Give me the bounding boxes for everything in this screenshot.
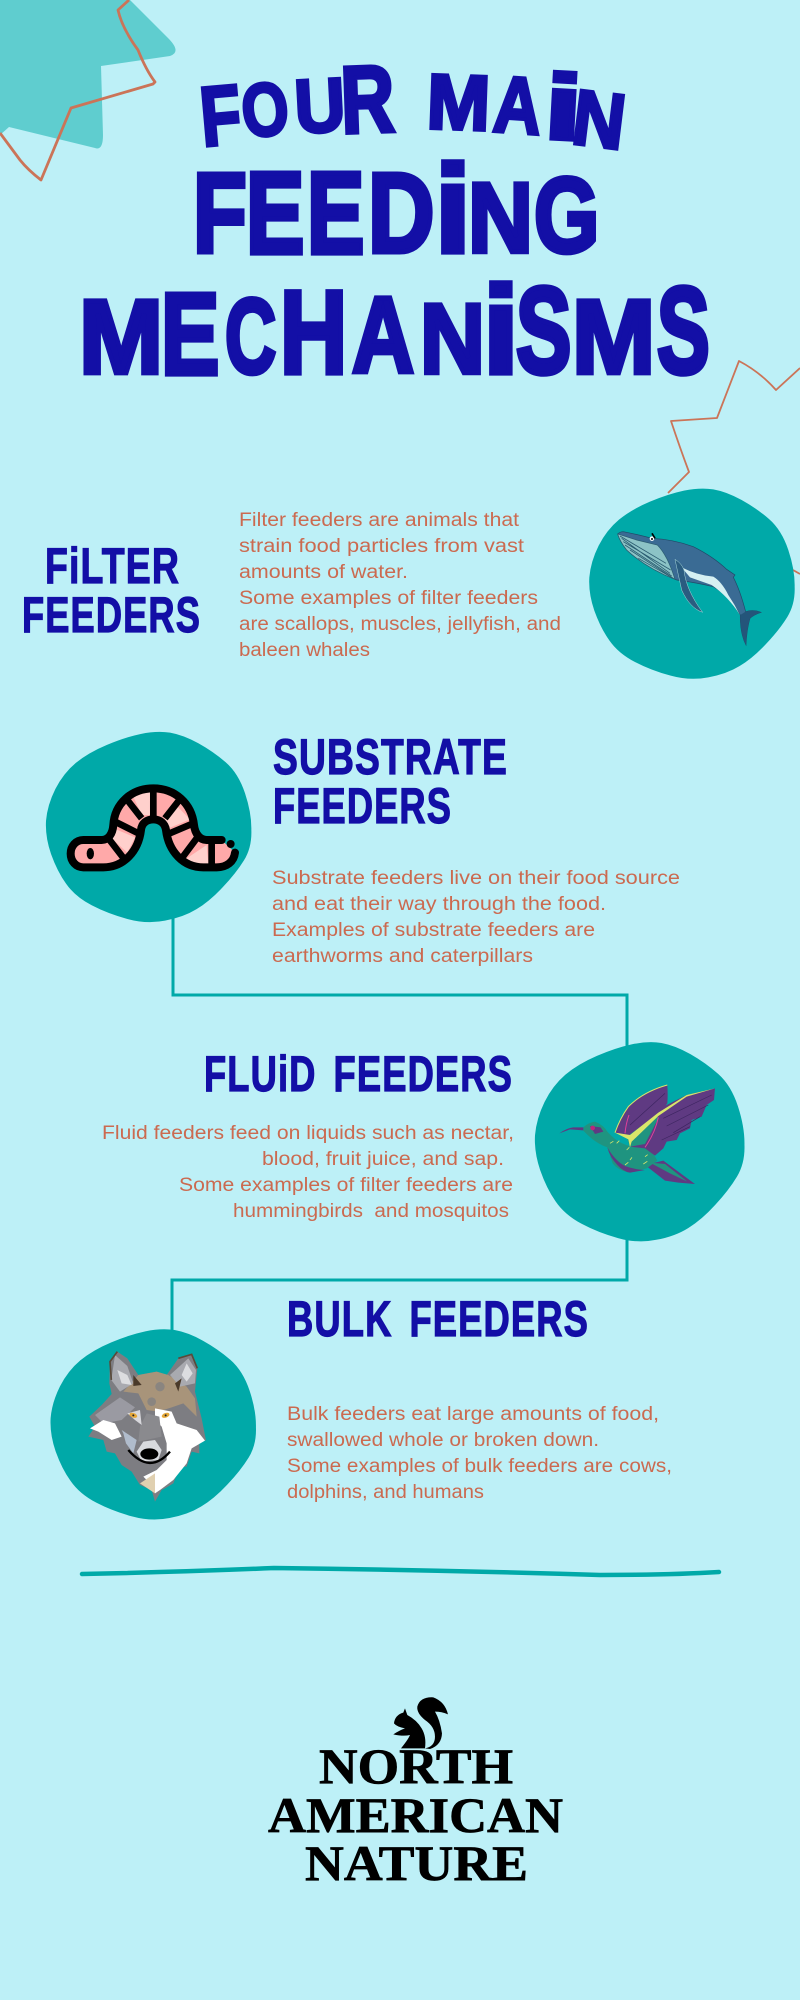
text: filter feeders description: amounts of water. — [239, 562, 408, 583]
text: filter feeders description: Some examples of filter feeders — [239, 588, 538, 609]
connector line: worm to hummingbird — [173, 915, 627, 1050]
connector line: hummingbird to wolf — [172, 1235, 627, 1335]
heading: filter feeders — [22, 538, 201, 643]
title: M — [79, 279, 163, 396]
title: D — [368, 151, 434, 277]
icon: squirrel — [393, 1697, 448, 1749]
title: F — [193, 151, 247, 277]
text: bulk feeders description: Some examples of bulk feeders are cows, — [287, 1456, 672, 1477]
logo wordmark: NORTH — [319, 1738, 513, 1794]
text: fluid feeders description — [102, 1123, 514, 1222]
text: substrate feeders description: earthworms and caterpillars — [272, 946, 533, 967]
text: bulk feeders description — [287, 1404, 672, 1503]
orange outline star top left — [0, 0, 155, 180]
orange outline star right — [668, 361, 800, 574]
heading: fluid feeders: FLUiD FEEDERS — [204, 1046, 513, 1102]
text: bulk feeders description: Bulk feeders eat large amounts of food, — [287, 1404, 659, 1425]
title: N — [420, 284, 485, 395]
title: M — [425, 58, 492, 148]
title: i — [483, 262, 519, 400]
title: A — [491, 60, 545, 152]
text: substrate feeders description: and eat their way through the food. — [272, 894, 606, 915]
heading: bulk feeders: BULK FEEDERS — [287, 1291, 589, 1347]
title: R — [339, 46, 396, 154]
text: fluid feeders description: hummingbirds and mosquitos — [233, 1201, 509, 1222]
text: fluid feeders description: Some examples of filter feeders are — [179, 1175, 513, 1196]
title — [79, 46, 710, 400]
text: substrate feeders description: Examples of substrate feeders are — [272, 920, 595, 941]
title: S — [516, 263, 571, 400]
text: bulk feeders description: swallowed whole or broken down. — [287, 1430, 599, 1451]
panel: filter feeders — [22, 489, 795, 679]
title: H — [280, 267, 347, 399]
title: M — [572, 279, 655, 396]
text: fluid feeders description: blood, fruit juice, and sap. — [262, 1149, 504, 1170]
text: filter feeders description: baleen whales — [239, 640, 370, 661]
title: E — [246, 149, 304, 279]
icon: worm in teal circle — [46, 732, 251, 922]
heading: substrate feeders: SUBSTRATE — [273, 729, 508, 785]
logo wordmark — [268, 1738, 563, 1891]
title: E — [307, 149, 364, 279]
heading: filter feeders: FiLTER — [45, 538, 180, 594]
text: substrate feeders description — [272, 868, 680, 967]
heading: filter feeders: FEEDERS — [22, 587, 201, 643]
title: E — [161, 270, 219, 400]
title: O — [237, 66, 293, 155]
text: substrate feeders description: Substrate feeders live on their food source — [272, 868, 680, 889]
text: filter feeders description: strain food particles from vast — [239, 536, 525, 557]
text: filter feeders description — [239, 510, 561, 661]
logo: North American Nature — [268, 1697, 563, 1891]
icon: whale in teal circle — [589, 489, 795, 679]
logo wordmark: NATURE — [305, 1835, 528, 1891]
title: C — [225, 277, 276, 397]
title: A — [352, 275, 414, 396]
panel: fluid feeders — [102, 1042, 745, 1241]
title: i — [435, 141, 471, 279]
panel: bulk feeders — [50, 1291, 672, 1520]
heading: substrate feeders — [273, 729, 508, 834]
icon: wolf in teal circle — [50, 1329, 256, 1520]
title: N — [568, 74, 630, 167]
title: S — [657, 263, 710, 400]
text: filter feeders description: Filter feeders are animals that — [239, 510, 520, 531]
text: filter feeders description: are scallops, muscles, jellyfish, and — [239, 614, 561, 635]
title: i — [542, 56, 585, 161]
title: N — [468, 163, 533, 274]
title: G — [534, 156, 599, 276]
icon: hummingbird in teal circle — [535, 1042, 745, 1241]
wavy divider — [82, 1568, 719, 1575]
text: bulk feeders description: dolphins, and humans — [287, 1482, 484, 1503]
title: F — [196, 68, 245, 165]
logo wordmark: AMERICAN — [268, 1787, 563, 1843]
text: fluid feeders description: Fluid feeders feed on liquids such as nectar, — [102, 1123, 514, 1144]
decorative star shape top left — [0, 0, 176, 148]
panel: substrate feeders — [46, 729, 680, 967]
heading: substrate feeders: FEEDERS — [273, 778, 452, 834]
title: U — [292, 63, 347, 150]
